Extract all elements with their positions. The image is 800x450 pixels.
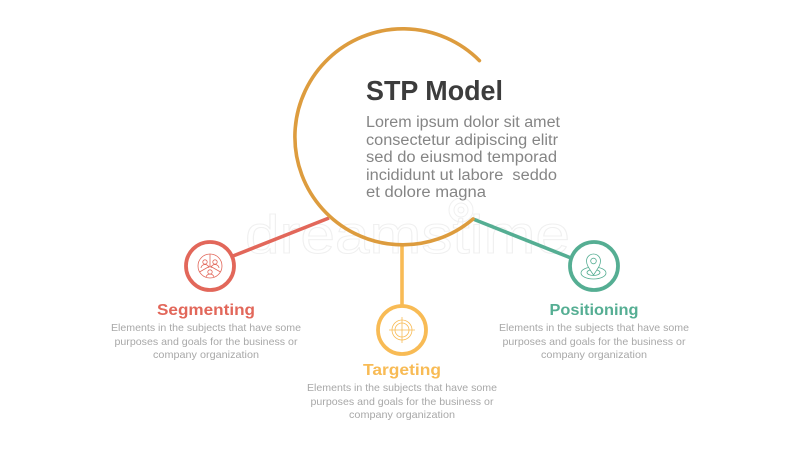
body text bbox=[366, 114, 561, 201]
description: targeting bbox=[307, 382, 497, 421]
heading: segmenting: Segmenting bbox=[157, 302, 255, 319]
connector: targeting bbox=[400, 246, 404, 306]
description: positioning: company organization bbox=[541, 349, 647, 361]
description: targeting: purposes and goals for the business or bbox=[310, 396, 494, 408]
icon: audience segments bbox=[198, 254, 222, 278]
description: segmenting: company organization bbox=[153, 349, 259, 361]
item: segmenting bbox=[111, 242, 301, 361]
description: positioning: purposes and goals for the business or bbox=[502, 336, 686, 348]
description: positioning: Elements in the subjects that have some bbox=[499, 322, 689, 334]
icon: segmenting ring bbox=[186, 242, 234, 290]
item: targeting bbox=[307, 306, 497, 421]
body text: sed do eiusmod temporad bbox=[366, 149, 557, 166]
connector: segmenting bbox=[233, 218, 329, 256]
watermark: dreamstime bbox=[245, 205, 570, 265]
connector: positioning bbox=[473, 219, 571, 258]
description: segmenting: Elements in the subjects that have some bbox=[111, 322, 301, 334]
heading: targeting: Targeting bbox=[363, 362, 441, 379]
description: segmenting bbox=[111, 322, 301, 361]
description: targeting: Elements in the subjects that have some bbox=[307, 382, 497, 394]
heading: positioning: Positioning bbox=[550, 302, 638, 319]
icon: map pin bbox=[581, 254, 606, 279]
description: positioning bbox=[499, 322, 689, 361]
body text: Lorem ipsum dolor sit amet bbox=[366, 114, 561, 131]
description: segmenting: purposes and goals for the business or bbox=[114, 336, 298, 348]
main arc bbox=[295, 29, 479, 245]
title: STP Model bbox=[366, 75, 503, 106]
icon: targeting ring bbox=[378, 306, 426, 354]
description: targeting: company organization bbox=[349, 409, 455, 421]
item: positioning bbox=[499, 242, 689, 361]
body text: et dolore magna bbox=[366, 184, 486, 201]
body text: incididunt ut labore seddo bbox=[366, 167, 557, 184]
icon: crosshair bbox=[389, 317, 415, 343]
watermark swirl bbox=[449, 198, 473, 222]
body text: consectetur adipiscing elitr bbox=[366, 132, 558, 149]
icon: positioning ring bbox=[570, 242, 618, 290]
